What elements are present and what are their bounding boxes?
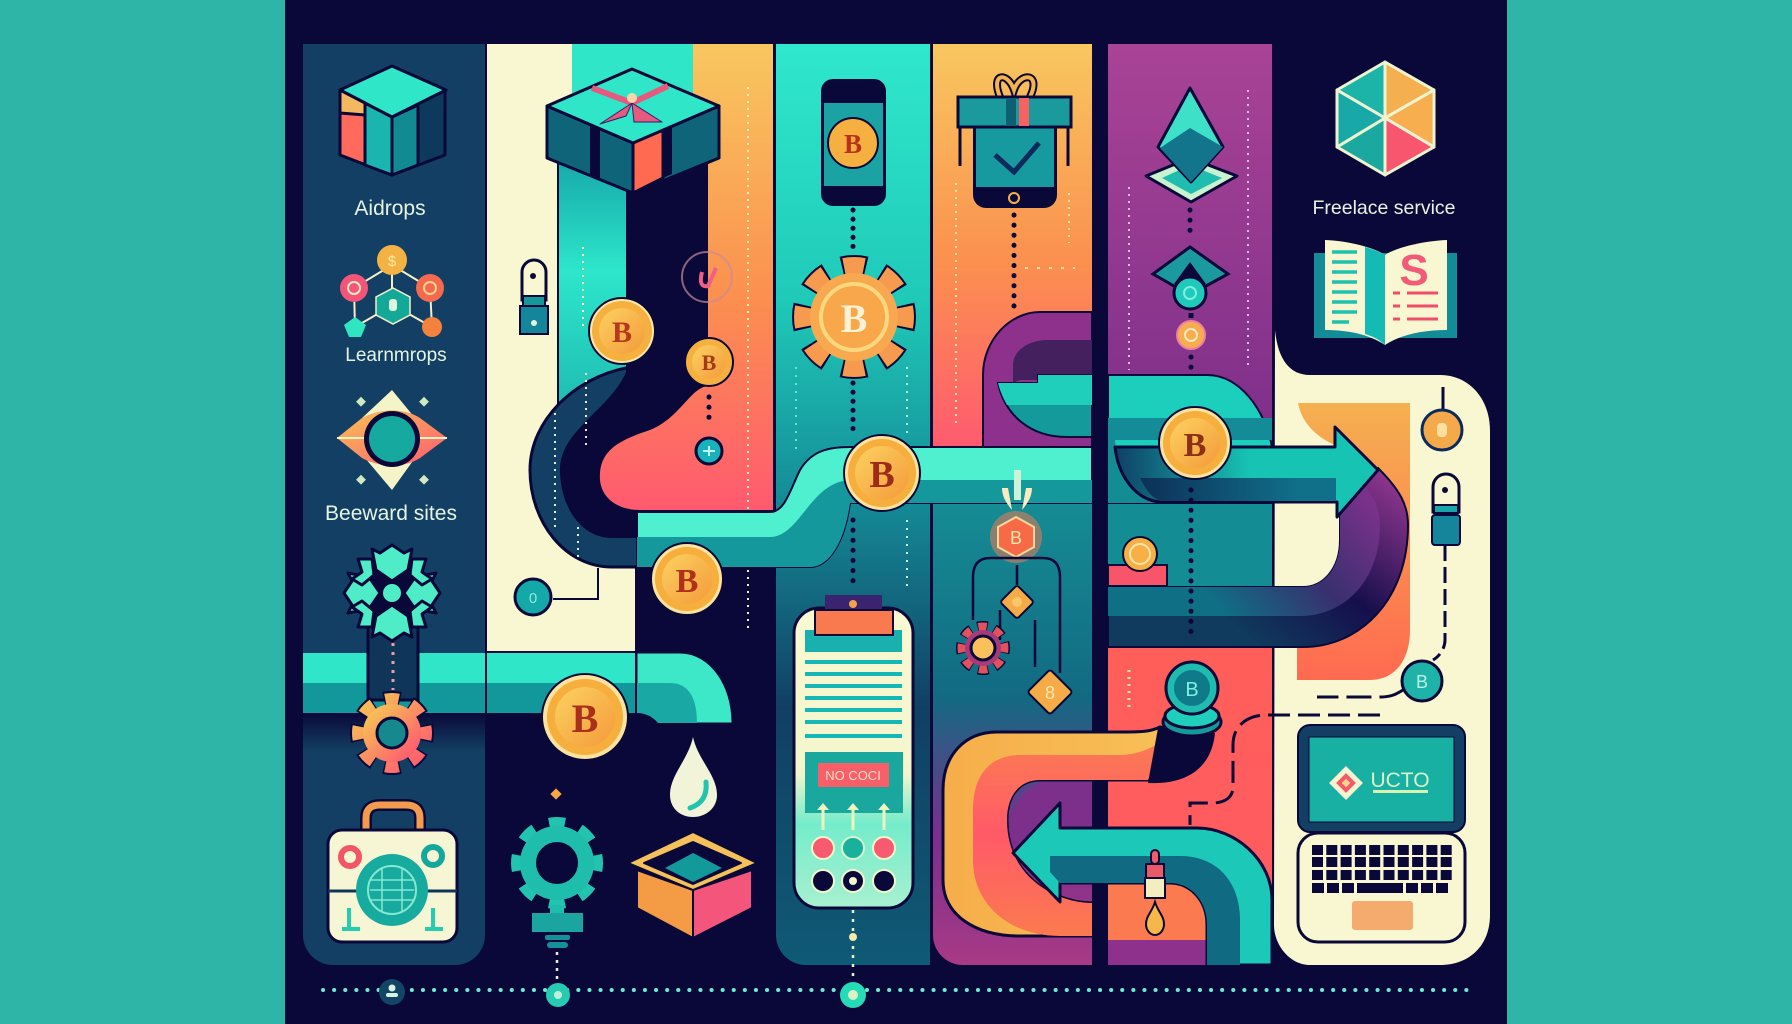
- pipe: right teal curve: [1108, 375, 1272, 503]
- icon: airdrop box: [340, 66, 446, 175]
- coin: bitcoin right: B: [1184, 427, 1206, 464]
- coin: bitcoin on teal: [589, 298, 655, 364]
- connector: clipboard to timeline: [849, 910, 857, 980]
- coin: bitcoin on elbow: B: [572, 696, 598, 741]
- panel: red column: [1108, 647, 1272, 965]
- icon: mint snowflake gear: [344, 545, 440, 641]
- icon: rewards eye: [337, 390, 447, 490]
- icon: token network: $: [388, 253, 397, 270]
- icon: phone with coin: B: [844, 129, 862, 159]
- connector: eth dots: [1188, 210, 1192, 233]
- pipe: bottom-left mint elbow: [487, 653, 732, 723]
- icon: teal coin right: B: [1416, 672, 1428, 692]
- coin: bitcoin centre: [844, 435, 920, 511]
- panel: second column: [776, 44, 930, 965]
- icon: cream connector coin: [515, 568, 598, 615]
- dotted line: red column: [1128, 670, 1130, 707]
- panel: third column: [933, 44, 1092, 447]
- connector: coin to red: [1188, 490, 1194, 636]
- icon: hexagon pie: [1337, 62, 1434, 175]
- dotted lines: purple column: [1129, 90, 1248, 370]
- icon: ethereum diamond: [1146, 88, 1237, 202]
- connector: phone to gear: [850, 210, 856, 250]
- panel: cream column: [487, 44, 635, 651]
- coin: bitcoin lower stream: B: [676, 563, 698, 600]
- icon: pipe head coin: B: [1185, 679, 1199, 701]
- icon: teal gear with stem: [521, 827, 593, 980]
- node: timeline mid: [546, 983, 570, 1007]
- divider: column gap: [1092, 44, 1108, 965]
- dotted lines: upper left: [583, 87, 748, 633]
- icon: open book: [1314, 240, 1457, 345]
- coin: small bitcoin: [685, 338, 733, 386]
- connector: lock to coin: [1433, 545, 1445, 660]
- coin: bitcoin on teal: B: [612, 316, 632, 349]
- label: freelance service: Freelace service: [1312, 197, 1456, 219]
- icon: coin on pink block: [1108, 537, 1167, 586]
- dotted lines: orange column: [956, 183, 1075, 428]
- bottom dotted timeline: [323, 979, 1470, 1008]
- connector dots: [706, 397, 712, 420]
- icon: gift box: [547, 69, 719, 193]
- panel: orange column: [693, 44, 773, 510]
- icon: lock: [520, 260, 548, 334]
- icon: teal coin right: [1402, 661, 1442, 701]
- label: learn drops: Learnmrops: [345, 345, 447, 366]
- icon: small diamond token: [1153, 247, 1228, 309]
- icon: lower diamond: [1027, 669, 1073, 715]
- panel: third column lower: [933, 503, 1092, 965]
- dotted lines: second column: [796, 367, 907, 587]
- arrow: right teal: [1108, 427, 1378, 517]
- icon: open box: [628, 832, 757, 938]
- band: left teal pipe: [303, 627, 485, 713]
- stream: dark pipe: [530, 150, 773, 567]
- label: laptop screen: UCTO: [1370, 769, 1430, 792]
- connector: red column dashed: [1190, 715, 1380, 825]
- icon: dropper: [1145, 850, 1165, 935]
- panel: teal column: [558, 44, 693, 420]
- panel: right cream: [1274, 330, 1490, 965]
- icon: gift phone: [958, 77, 1071, 208]
- icon: bitcoin gear: B: [841, 296, 867, 341]
- icon: teal drop: [696, 438, 722, 464]
- pipe: purple elbow: [983, 312, 1092, 447]
- node: timeline right: [840, 982, 866, 1008]
- coin: bitcoin lower stream: [651, 543, 723, 615]
- icon: faint bulb: [682, 252, 732, 302]
- connector: coin to clipboard: [850, 520, 856, 590]
- arrow: left teal with curve: [1013, 803, 1272, 965]
- icon: small gear: [962, 627, 1004, 669]
- coin: bitcoin right: [1159, 407, 1231, 479]
- label: phone button: NO COCI: [825, 768, 881, 783]
- icon: laptop: [1298, 725, 1465, 942]
- shape: purple ring band: [1108, 468, 1408, 647]
- panel: right teal block: [1108, 440, 1272, 587]
- label: reward sites: Beeward sites: [325, 502, 457, 525]
- icon: pipe head coin: [1148, 662, 1221, 783]
- label: airdrops: Aidrops: [354, 197, 426, 220]
- icon: bitcoin gear: [804, 267, 904, 367]
- icon: briefcase: [328, 805, 457, 942]
- icon: right lock: [1432, 474, 1460, 545]
- coin: bitcoin centre: B: [869, 454, 895, 496]
- pipe: mint band across: [637, 447, 1092, 567]
- shape: orange backing: [1297, 403, 1410, 680]
- connector: coin to left: [1317, 690, 1403, 697]
- icon: lower diamond: 8: [1045, 683, 1055, 703]
- icon: token network: [340, 245, 444, 337]
- panel: left column: [303, 44, 485, 965]
- icon: clipboard phone: [794, 595, 913, 908]
- icon: glowing small coin: [1177, 313, 1205, 349]
- coin: small bitcoin: B: [702, 350, 717, 375]
- coin: bitcoin on elbow: [542, 674, 628, 760]
- icon: warm gear: [360, 701, 424, 765]
- icon: open book: S: [1399, 246, 1429, 295]
- panel: purple column: [1108, 44, 1272, 444]
- icon: top right coin: [1422, 387, 1462, 450]
- pipe: yellow U: [943, 727, 1210, 936]
- icon: glowing token and branches: [962, 470, 1073, 715]
- icon: water drop: [670, 737, 717, 817]
- icon: upper diamond: [1000, 585, 1034, 619]
- icon: phone with coin: [821, 79, 886, 206]
- right side bar: [1507, 0, 1792, 1024]
- icon: glowing token and branches: B: [1010, 528, 1022, 548]
- icon: diamond spark: [550, 788, 562, 800]
- node: timeline person: [379, 979, 405, 1005]
- connector: gear to band: [850, 383, 856, 430]
- connector: gift phone to pipe: [1012, 215, 1016, 308]
- connector: small coin down: [1188, 357, 1194, 396]
- icon: cream connector coin: 0: [529, 590, 537, 607]
- shape: inner purple: [1011, 782, 1092, 850]
- left side bar: [0, 0, 285, 1024]
